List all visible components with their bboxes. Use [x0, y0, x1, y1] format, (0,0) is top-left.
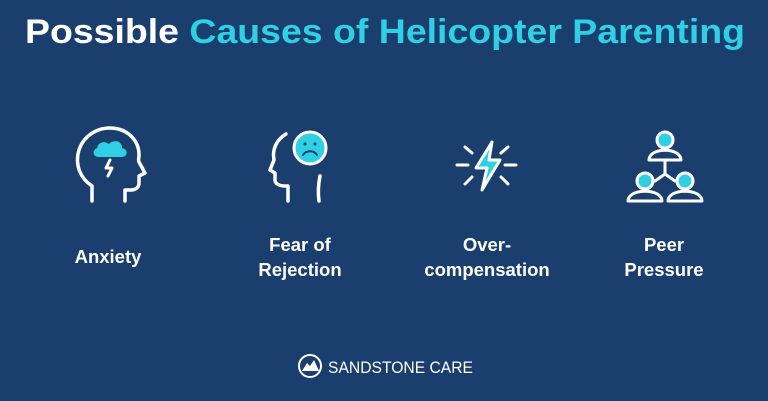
- title: Possible Causes of Helicopter Parenting: [25, 13, 745, 51]
- panel: fear of rejection: Rejection: [258, 259, 342, 280]
- logo: Sandstone Care: [299, 355, 473, 377]
- logo: Sandstone Care: SANDSTONE CARE: [328, 358, 473, 377]
- panel: peer pressure: Pressure: [624, 259, 704, 280]
- panel: anxiety: [75, 128, 145, 267]
- icon: head with sad face: [270, 132, 326, 201]
- label: Anxiety: Anxiety: [75, 246, 142, 267]
- panel: peer pressure: [624, 132, 704, 280]
- panel: fear of rejection: [258, 132, 342, 280]
- icon: lightning bolt with rays: [457, 142, 516, 190]
- label: Fear of Rejection: Fear of: [269, 234, 332, 255]
- panel: over-compensation: [424, 142, 550, 280]
- icon: network of people: [628, 132, 702, 201]
- panel: over-compensation: compensation: [424, 259, 550, 280]
- label: Peer Pressure: Peer: [644, 234, 684, 255]
- label: Over-compensation: Over-: [463, 234, 511, 255]
- icon: head with storm cloud: [78, 128, 145, 201]
